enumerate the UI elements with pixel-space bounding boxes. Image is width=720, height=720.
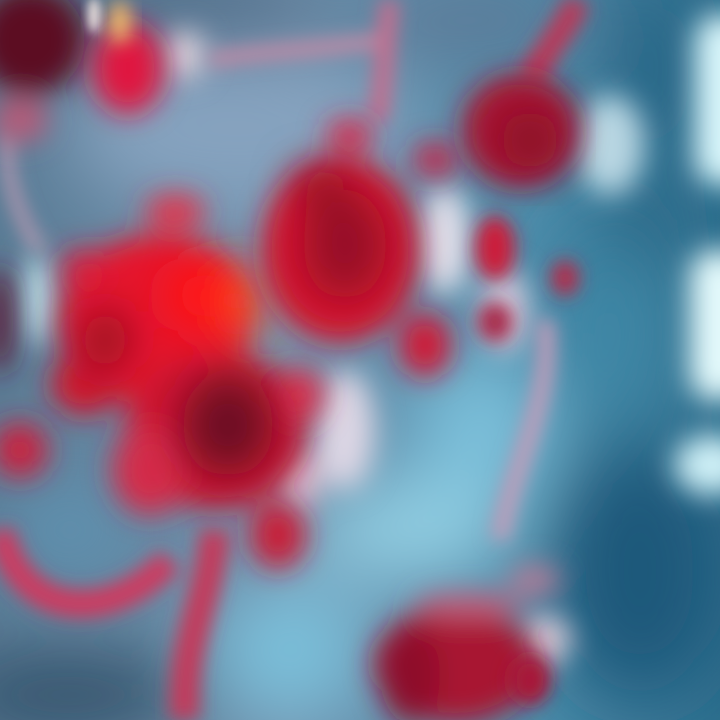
strand: right vertical [500, 320, 546, 540]
cell: upper right [462, 74, 578, 186]
strand: left pale [7, 130, 40, 250]
pale membrane highlights [22, 31, 644, 666]
strand: lower left curl [0, 530, 170, 604]
cell: bottom center [373, 566, 561, 720]
strand: central stem [184, 530, 215, 720]
cell: left edge small [0, 265, 48, 478]
cell: main left cluster [51, 194, 324, 569]
cell: top red with orange glint [88, 0, 164, 114]
bright window light at right edge [674, 15, 720, 495]
strand: top horizontal [210, 40, 385, 60]
strand: top vertical [378, 0, 390, 120]
cell: central upper cluster [262, 119, 457, 377]
cell: small right cells [475, 216, 579, 342]
cell: top left dark [0, 0, 85, 142]
strand: upper right [530, 0, 578, 80]
